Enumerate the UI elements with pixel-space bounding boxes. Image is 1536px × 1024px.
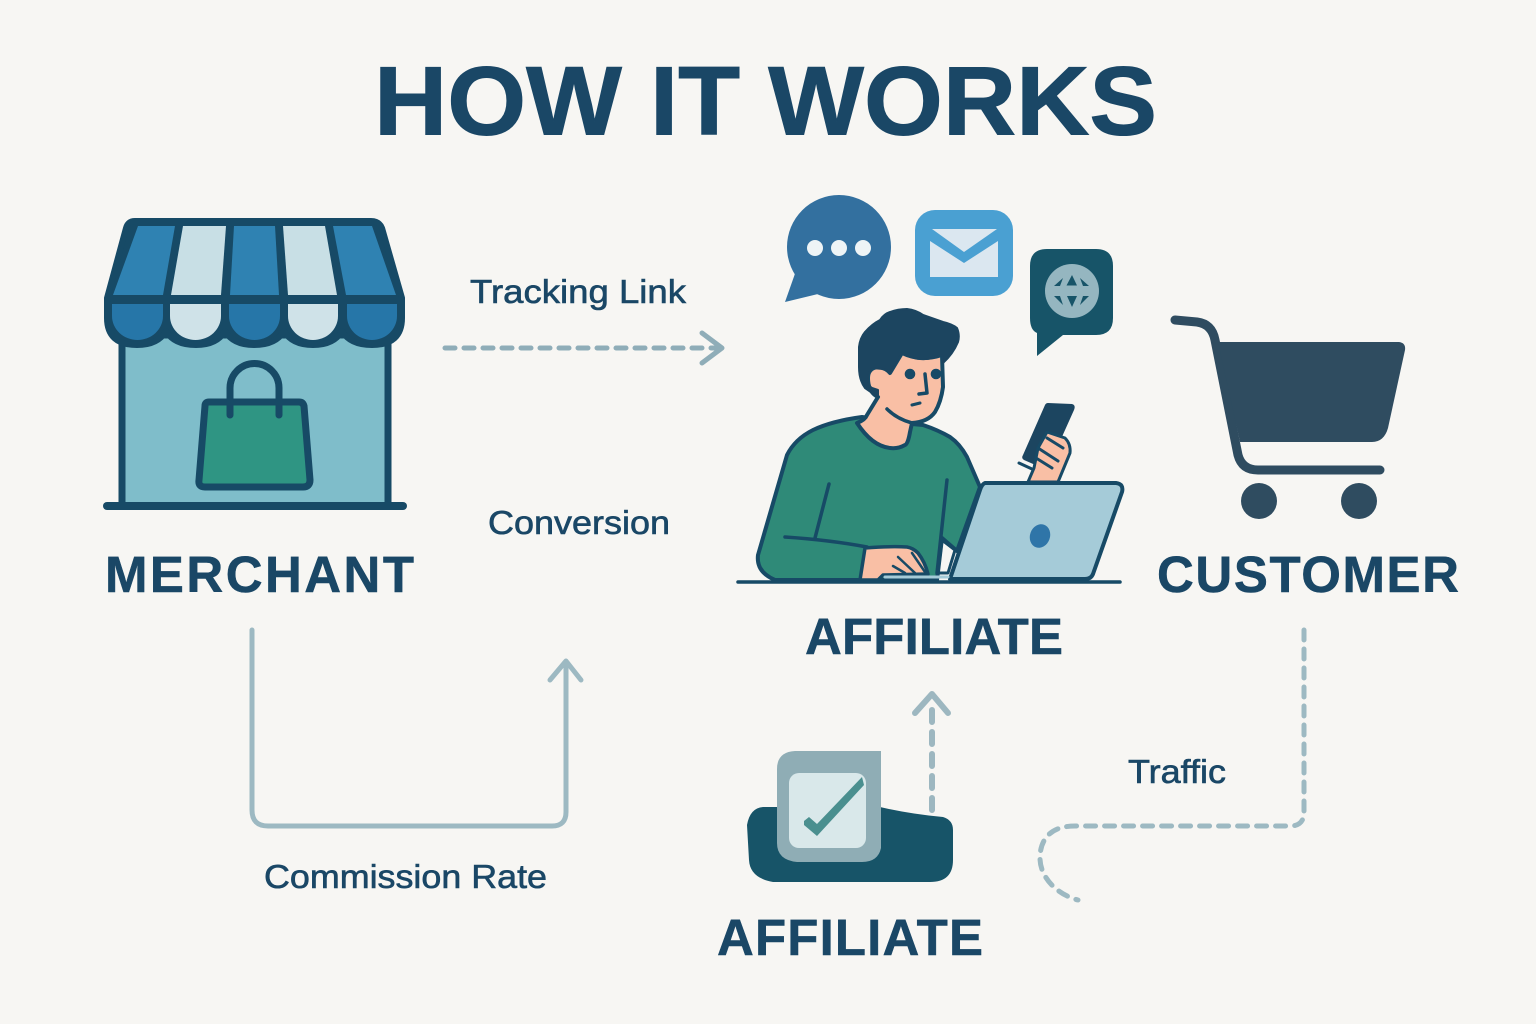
laptop (885, 483, 1122, 579)
illustration: affiliate with phone and laptop (738, 309, 1122, 582)
hand on laptop (860, 547, 928, 580)
check mark (804, 777, 864, 836)
arrow: approval to affiliate (915, 694, 948, 810)
platform (747, 807, 953, 882)
face details (887, 370, 940, 423)
label: tracking link: Tracking Link (470, 273, 687, 310)
icon: merchant storefront (107, 221, 403, 506)
customer label: CUSTOMER (1157, 546, 1459, 603)
icon: approval checkbox on platform (747, 751, 953, 882)
checkbox face (789, 773, 866, 848)
label: commission rate: Commission Rate (264, 858, 547, 895)
hand with phone (1019, 432, 1070, 482)
icon: email (915, 210, 1013, 296)
desk line (738, 580, 1120, 584)
affiliate label lower: AFFILIATE (717, 909, 983, 966)
arrow: tracking link (445, 333, 722, 363)
sweater creases (785, 480, 947, 573)
label: traffic: Traffic (1128, 753, 1226, 790)
title: HOW IT WORKS (374, 46, 1157, 156)
neck and face (857, 353, 943, 448)
gap behind arm (938, 540, 955, 573)
arrow: commission rate (252, 630, 581, 826)
phone (1022, 403, 1075, 469)
storefront wall (122, 335, 388, 506)
label: conversion: Conversion (488, 504, 670, 541)
icon: shopping cart (1175, 320, 1405, 519)
icon: globe bubble (1030, 249, 1113, 356)
ground line (107, 502, 403, 510)
arrow: traffic (1040, 630, 1304, 900)
merchant label: MERCHANT (105, 546, 414, 603)
checkbox card (777, 751, 881, 862)
awning (107, 221, 402, 345)
hair (859, 309, 959, 397)
sweater (758, 417, 980, 580)
affiliate label: AFFILIATE (805, 608, 1063, 665)
shopping bag (199, 364, 310, 487)
icon: chat bubble (785, 195, 891, 302)
